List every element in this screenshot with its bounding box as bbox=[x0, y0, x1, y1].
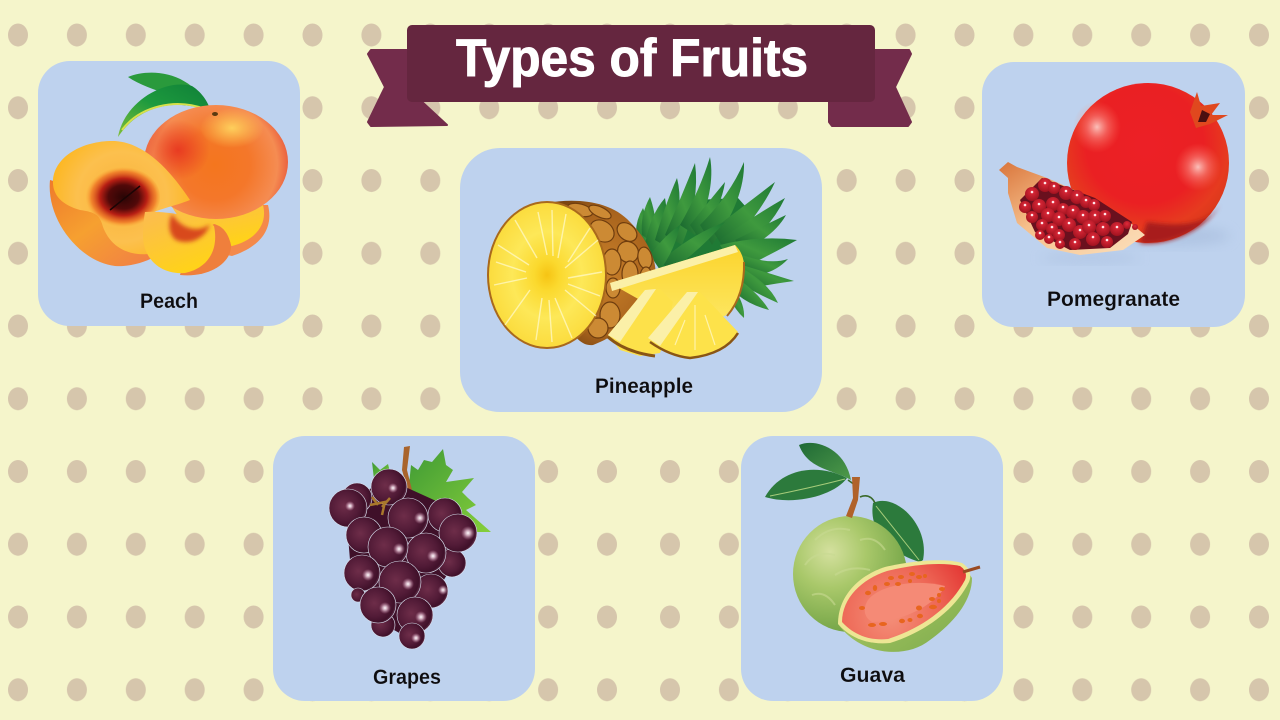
grape leaves bbox=[372, 449, 491, 532]
title: Types of Fruits bbox=[456, 29, 808, 88]
pineapple rind bbox=[546, 201, 656, 345]
grape stem bbox=[402, 446, 414, 498]
ribbon right tail bbox=[829, 50, 911, 126]
guava whole fruit bbox=[793, 516, 907, 632]
guava half fruit bbox=[838, 560, 980, 652]
guava leaves bbox=[799, 443, 851, 480]
pineapple wedges bbox=[608, 289, 738, 358]
panel: pineapple bbox=[460, 148, 822, 412]
label: Guava: Guava bbox=[840, 664, 905, 687]
pomegranate fruit bbox=[1067, 83, 1229, 243]
pineapple cut face bbox=[487, 201, 607, 349]
icon: guava illustration bbox=[765, 443, 980, 652]
icon: pomegranate illustration bbox=[999, 83, 1230, 263]
front slice bbox=[180, 224, 231, 275]
icon: pineapple illustration bbox=[487, 157, 797, 358]
label: Pineapple: Pineapple bbox=[595, 375, 693, 398]
grape bunch mass bbox=[345, 480, 470, 640]
guava stem bbox=[846, 477, 860, 518]
pineapple half slice bbox=[610, 245, 744, 320]
ribbon main band bbox=[407, 25, 875, 102]
icon: peach illustration bbox=[50, 73, 288, 275]
label: Grapes: Grapes bbox=[373, 666, 441, 689]
pineapple crown leaves bbox=[636, 157, 797, 318]
grape berries bbox=[329, 469, 477, 649]
ribbon left tail bbox=[368, 50, 447, 126]
panel: pomegranate bbox=[982, 62, 1245, 327]
half peach skin bbox=[50, 180, 165, 266]
label: Pomegranate: Pomegranate bbox=[1047, 288, 1180, 311]
panel: peach bbox=[38, 61, 300, 326]
back slice skin bbox=[178, 205, 269, 256]
panel: guava bbox=[741, 436, 1003, 701]
icon: grapes illustration bbox=[329, 446, 491, 649]
label: Peach: Peach bbox=[140, 290, 198, 313]
whole peach bbox=[144, 105, 288, 219]
grape highlights bbox=[345, 483, 475, 643]
title banner bbox=[368, 25, 911, 126]
half peach flesh bbox=[53, 141, 190, 254]
panel: grapes bbox=[273, 436, 535, 701]
pomegranate wedge bbox=[999, 162, 1145, 263]
pomegranate crown bbox=[1190, 92, 1228, 128]
